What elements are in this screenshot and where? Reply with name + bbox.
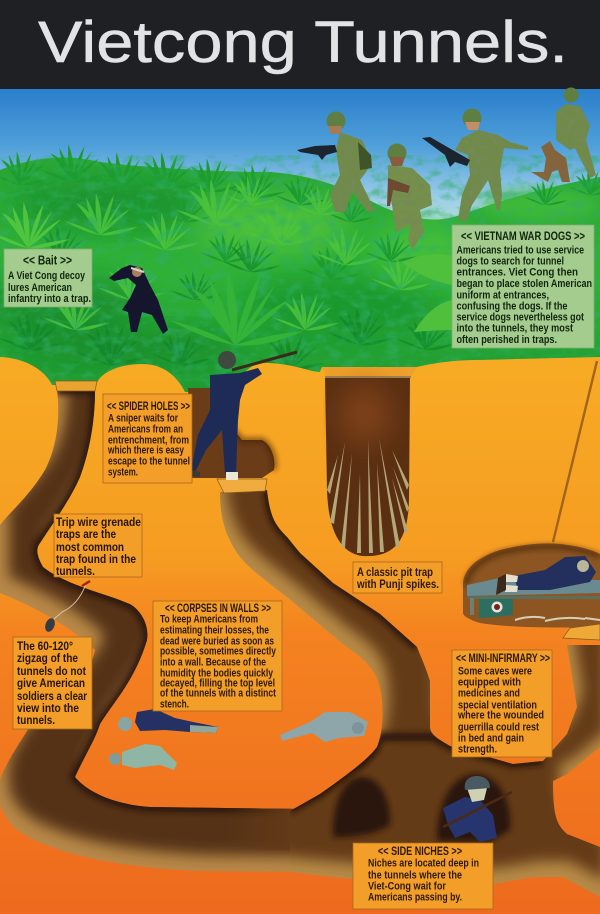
callout: Bait: A Viet Cong decoy (8, 270, 85, 282)
callout: Corpses in Walls: stench. (160, 698, 189, 710)
callout: Corpses in Walls: << CORPSES IN WALLS >> (165, 603, 271, 615)
callout: Side Niches: Viet-Cong wait for (368, 880, 446, 892)
callout: Trip wire: traps are the (56, 527, 116, 541)
callout: Spider Holes (103, 394, 192, 483)
callout: zigzag: The 60-120° (17, 639, 73, 653)
callout: Mini-Infirmary: << MINI-INFIRMARY >> (456, 653, 550, 665)
callout: Vietnam War Dogs: into the tunnels, they most (456, 322, 573, 334)
soldier with dog (531, 88, 596, 182)
callout: Trip wire (54, 514, 142, 578)
bandages on floor (515, 617, 600, 621)
centre tunnel, chamber and right tunnel (215, 474, 600, 900)
callout: Mini-Infirmary: special ventilation (458, 700, 537, 712)
callout: Pit trap (353, 562, 442, 593)
mini-infirmary cave (463, 543, 600, 628)
viet cong decoy (109, 265, 168, 334)
sniper (190, 351, 297, 480)
foliage texture (0, 155, 600, 400)
spider hole (188, 388, 274, 478)
pit (325, 378, 410, 556)
patient (514, 556, 596, 590)
callout: zigzag: tunnels do not (17, 664, 86, 678)
soldier 2 (387, 144, 432, 250)
callout: zigzag: zigzag of the (17, 651, 78, 665)
callout: Mini-Infirmary: equipped with (458, 676, 521, 688)
callout: Mini-Infirmary: Some caves were (458, 666, 532, 678)
callout: Pit trap: with Punji spikes. (356, 579, 439, 591)
callout: Spider Holes: << SPIDER HOLES >> (107, 401, 190, 413)
callout: Trip wire: trap found in the (56, 552, 136, 566)
sky (0, 89, 600, 229)
callout: Mini-Infirmary: medicines and (458, 688, 520, 700)
callout: Spider Holes: system. (108, 466, 138, 478)
callout: Corpses in Walls: into a wall. Because of the (160, 656, 266, 668)
icon: dog (531, 141, 570, 182)
callout: Vietnam War Dogs: uniform at entrances, (456, 290, 549, 302)
grenade and trip wire (43, 581, 90, 633)
palm frond left (0, 202, 70, 248)
callout: Bait (4, 249, 92, 307)
callout: Bait: infantry into a trap. (8, 293, 91, 305)
callout: Vietnam War Dogs: entrances. Viet Cong then (456, 266, 578, 278)
callout: Spider Holes: Americans from an (108, 424, 183, 436)
callout: zigzag: view into the (17, 701, 79, 715)
soldier 3 (422, 108, 528, 222)
callout: Vietnam War Dogs: dogs to search for tunnel (456, 256, 564, 268)
callout: Pit trap: A classic pit trap (357, 567, 433, 579)
callout: zigzag (13, 637, 92, 729)
lid: left tunnel entrance (55, 381, 97, 391)
callout: zigzag: tunnels. (17, 713, 55, 727)
callout: Side Niches: the tunnels where the (368, 870, 462, 882)
pit lid (322, 367, 417, 377)
medicine box (479, 599, 513, 618)
jungle ferns (0, 144, 600, 280)
ledge under spider hole (217, 479, 267, 493)
callout: Spider Holes: which there is easy (107, 444, 184, 456)
callout: Corpses in Walls: estimating their losses, the (160, 624, 269, 636)
callout: Side Niches (353, 843, 493, 909)
callout: Bait: << Bait >> (23, 254, 72, 268)
callout: Side Niches: Americans passing by. (368, 892, 462, 904)
title: Vietcong Tunnels. (38, 10, 568, 75)
callout: Vietnam War Dogs: confusing the dogs. If the (456, 300, 568, 312)
callout: Vietnam War Dogs (452, 225, 594, 348)
callout: Trip wire: tunnels. (56, 564, 95, 578)
callout: zigzag: give American (17, 676, 85, 690)
palm frond centre (170, 272, 303, 346)
callout: Trip wire: most common (56, 540, 124, 554)
soil ground (0, 357, 600, 914)
bed (467, 578, 600, 596)
callout: Corpses in Walls: decayed, filling the top level (160, 678, 275, 690)
side niche right (437, 774, 510, 842)
callout: Corpses in Walls: humidity the bodies quickly (160, 668, 273, 680)
callout: Side Niches: << SIDE NICHES >> (378, 846, 462, 858)
punji spikes (327, 438, 409, 553)
callout: Corpses in Walls: dead were buried as soon as (160, 636, 274, 648)
corpse: grey right (280, 712, 368, 742)
title bar (0, 0, 600, 89)
callout: zigzag: soldiers a clear (17, 689, 87, 703)
callout: Trip wire: Trip wire grenade (56, 515, 141, 529)
corpse: navy uniform (118, 709, 218, 733)
air shaft (553, 361, 597, 542)
callout: Corpses in Walls: To keep Americans from (160, 614, 258, 626)
rifle (232, 352, 297, 370)
callout: Spider Holes: entrenchment, from (108, 434, 189, 446)
corpse: pale green (109, 744, 177, 770)
left and lower zigzag tunnel (0, 374, 309, 875)
callout: Spider Holes: A sniper waits for (108, 412, 178, 424)
callout: Side Niches: Niches are located deep in (368, 858, 479, 870)
callout: Corpses in Walls: possible, sometimes directly (160, 646, 276, 658)
niche soldier (443, 776, 512, 842)
callout: Spider Holes: escape to the tunnel (108, 456, 190, 468)
callout: Mini-Infirmary (452, 650, 552, 757)
punji pit trap (322, 367, 417, 556)
soldier 1 (297, 112, 376, 212)
callout: Mini-Infirmary: strength. (458, 744, 497, 756)
callout: Corpses in Walls: of the tunnels with a distinct (160, 688, 276, 700)
side niche left (333, 777, 390, 837)
callout: Corpses in Walls (153, 601, 282, 711)
jungle hillside (0, 144, 600, 400)
callout: Mini-Infirmary: in bed and gain (458, 732, 524, 744)
callout: Mini-Infirmary: where the wounded (457, 710, 544, 722)
callout: Bait: lures American (8, 282, 72, 294)
tunnel blend into chamber (236, 808, 294, 850)
right tunnel lid (563, 624, 600, 640)
banana leaves right (402, 254, 452, 332)
callout: Vietnam War Dogs: often perished in traps. (456, 334, 557, 346)
callout: Mini-Infirmary: guerrilla could rest (458, 722, 539, 734)
